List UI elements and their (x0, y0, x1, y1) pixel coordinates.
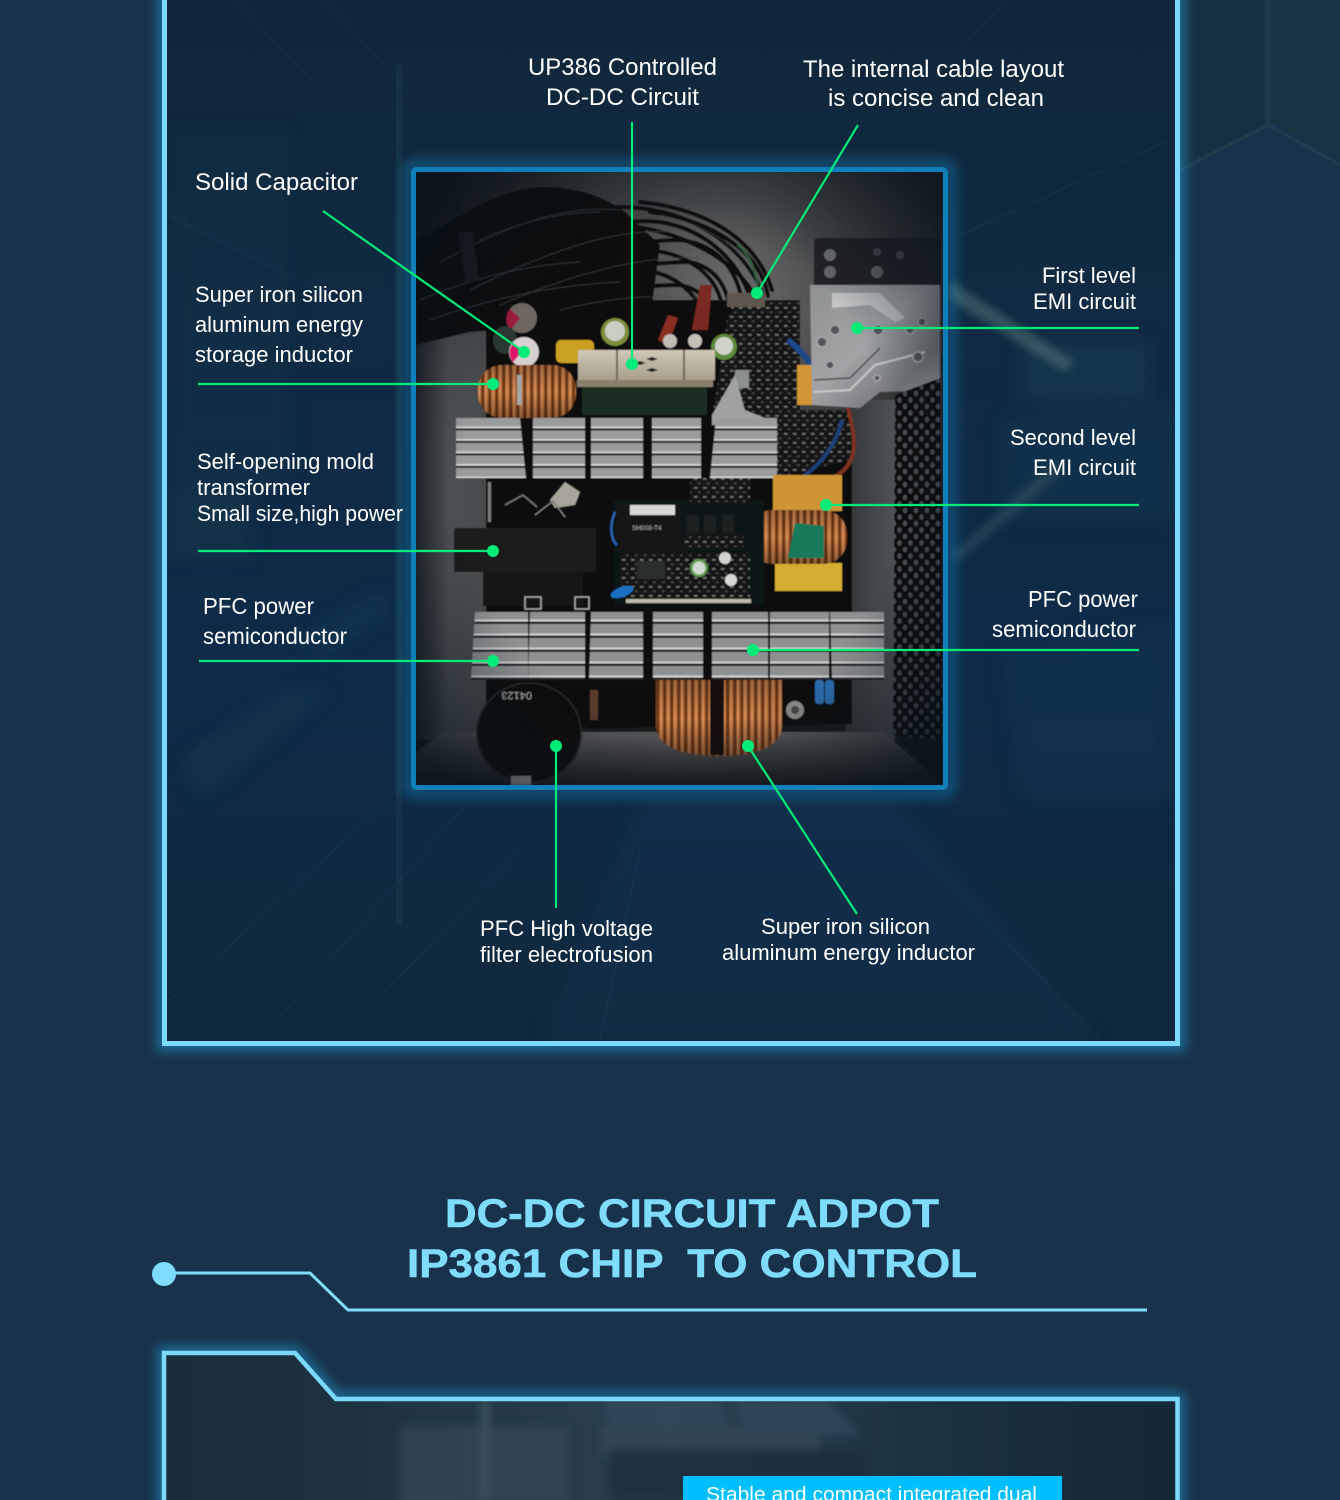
label: transformer: transformer (197, 475, 310, 500)
label: storage inductor: storage inductor (195, 342, 353, 367)
gold-green capacitors (601, 318, 629, 346)
photo frame glow (408, 164, 951, 793)
label: energy inductor: Super iron silicon (761, 914, 930, 939)
label: storage inductor: Super iron silicon (195, 282, 363, 307)
PCB (486, 300, 852, 730)
label: UP386 controlled: UP386 Controlled (528, 54, 717, 81)
leader: transformer (198, 550, 493, 552)
panel: PSU internals (164, 0, 1178, 1044)
background decoration: hexagon lines at right (1180, 0, 1340, 170)
EMI choke coil (763, 509, 848, 565)
wires near EMI (832, 408, 854, 478)
chassis back (416, 172, 943, 785)
second-level EMI capacitors (773, 475, 842, 511)
panel 2 glow (164, 1353, 1178, 1500)
bottom inductor coil (656, 680, 782, 756)
leader: PFC left (199, 660, 493, 662)
label: first level EMI: First level (1042, 263, 1136, 288)
label: UP386 controlled (528, 54, 717, 111)
leader: second level EMI (826, 504, 1139, 506)
heading connector with dot (152, 1262, 1147, 1310)
photo: power supply interior: 04123 (501, 689, 532, 701)
panel background (167, 0, 1175, 1041)
photo vignette (416, 172, 943, 785)
control chip module (617, 503, 681, 551)
DC-DC module (578, 350, 715, 380)
photo: power supply interior (416, 172, 943, 785)
label: second level EMI (1010, 425, 1137, 480)
label: cable layout (803, 56, 1064, 112)
label: PFC right: semiconductor (992, 616, 1136, 642)
first-level EMI block (814, 238, 940, 285)
yellow part (556, 340, 594, 363)
leader: first level EMI (857, 327, 1139, 329)
ventilation mesh (893, 378, 943, 740)
label: second level EMI: Second level (1010, 425, 1136, 450)
bits near transformer (550, 482, 580, 508)
left wall (416, 330, 487, 740)
storage inductor coil (478, 365, 576, 418)
leader: UP386 circuit (631, 122, 633, 364)
label: first level EMI (1033, 263, 1137, 314)
panel glow (164, 0, 1178, 1044)
leader: storage inductor (198, 383, 493, 385)
right wall (845, 400, 895, 740)
photo frame (414, 170, 946, 788)
label: filter capacitor: PFC High voltage (480, 916, 653, 941)
leader: cable layout (757, 125, 858, 293)
main filter capacitor (477, 683, 581, 783)
leader: energy inductor (748, 746, 857, 914)
leader: PFC right (753, 649, 1139, 651)
label: solid capacitor: Solid Capacitor (195, 169, 358, 196)
blurred board photo (400, 1400, 870, 1500)
transformer (454, 528, 596, 572)
cable bundle (416, 187, 772, 352)
label: storage inductor: aluminum energy (195, 312, 364, 337)
upper heatsink (456, 418, 777, 478)
label: PFC right (992, 586, 1138, 642)
photo: power supply interior: SH008-T4 (632, 525, 662, 532)
label: second level EMI: EMI circuit (1033, 455, 1137, 480)
section heading: IP3861 CHIP TO CONTROL (407, 1242, 977, 1286)
label: transformer: Small size,high power (197, 501, 403, 526)
label: UP386 controlled: DC-DC Circuit (546, 84, 699, 111)
label: energy inductor: aluminum energy inductor (722, 940, 975, 965)
capacitor group top left (507, 303, 537, 333)
central control board (614, 500, 764, 605)
label: PFC left (203, 593, 347, 649)
label: PFC left: PFC power (203, 593, 314, 619)
lower heatsink (471, 612, 884, 680)
upper right SMD area (712, 300, 852, 480)
small board components (735, 370, 749, 388)
panel background streaks (168, 0, 1175, 1040)
label: storage inductor (195, 282, 364, 367)
label: cable layout: The internal cable layout (803, 56, 1064, 83)
label: PFC left: semiconductor (203, 623, 347, 649)
panel 2 border (164, 1353, 1178, 1500)
section heading (407, 1192, 977, 1286)
panel: DC-DC chip (164, 1353, 1178, 1500)
leader: filter capacitor (555, 746, 557, 908)
chassis floor (416, 732, 943, 785)
blue capacitors and screw (815, 680, 824, 704)
label: PFC right: PFC power (1028, 586, 1138, 612)
panel 2 background (164, 1353, 1177, 1500)
label: transformer (197, 449, 403, 526)
leader: solid capacitor (323, 211, 524, 352)
label: energy inductor (722, 914, 975, 965)
label: transformer: Self-opening mold (197, 449, 374, 474)
label: filter capacitor: filter electrofusion (480, 942, 653, 967)
label: cable layout: is concise and clean (828, 85, 1044, 112)
vertical light bar (396, 65, 402, 925)
small red cable boots (692, 285, 712, 330)
solid capacitor (509, 337, 539, 367)
callout leader lines (198, 122, 1139, 914)
callout dots (487, 287, 863, 752)
label: first level EMI: EMI circuit (1033, 289, 1137, 314)
label: filter capacitor (480, 916, 653, 967)
section heading: DC-DC CIRCUIT ADPOT (445, 1192, 939, 1236)
panel border (164, 0, 1178, 1044)
callout: dual chip description (683, 1476, 1062, 1500)
